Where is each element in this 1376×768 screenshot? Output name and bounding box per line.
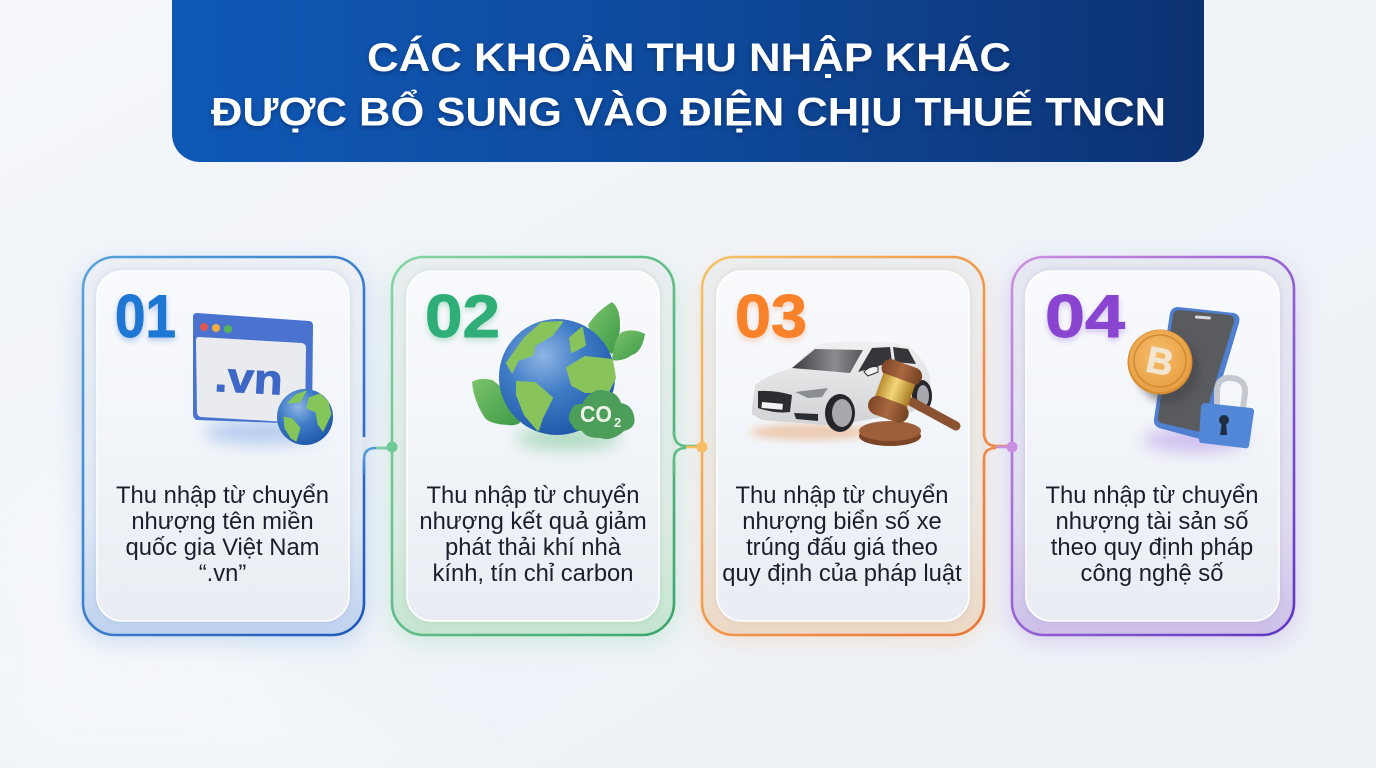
card 04 text: theo quy định pháp bbox=[1051, 534, 1253, 561]
card 03 text: trúng đấu giá theo bbox=[746, 534, 938, 561]
card 02 text: nhượng kết quả giảm bbox=[419, 508, 647, 535]
card 01 text: Thu nhập từ chuyển bbox=[116, 482, 329, 509]
card 04 text bbox=[1045, 482, 1259, 587]
card 04 text: công nghệ số bbox=[1081, 560, 1223, 587]
title text: ĐƯỢC BỔ SUNG VÀO ĐIỆN CHỊU THUẾ TNCN bbox=[211, 88, 1166, 134]
number 03: 03 bbox=[735, 283, 807, 350]
icon: phone with bitcoin coin and padlock: B bbox=[1143, 339, 1177, 384]
icon: .vn browser window with globe bbox=[193, 313, 333, 445]
card 01 text: quốc gia Việt Nam bbox=[125, 534, 320, 561]
panel: card 03 car auction bbox=[700, 257, 986, 641]
icon: earth with leaves and CO2 cloud bbox=[472, 302, 645, 450]
panel: card 04 digital assets bbox=[1010, 257, 1296, 641]
icon: phone with bitcoin coin and padlock bbox=[1128, 307, 1254, 452]
title text bbox=[211, 34, 1166, 134]
icon: earth with leaves and CO2 cloud: 2 bbox=[614, 415, 621, 430]
panel: card 02 carbon bbox=[390, 257, 676, 641]
connector: card 2 to card 3 bbox=[672, 432, 708, 474]
title text: CÁC KHOẢN THU NHẬP KHÁC bbox=[367, 34, 1011, 80]
connector: card 3 to card 4 bbox=[982, 432, 1018, 474]
card 03 text: Thu nhập từ chuyển bbox=[735, 482, 949, 509]
card 03 text: nhượng biển số xe bbox=[742, 508, 942, 535]
card 02 text: Thu nhập từ chuyển bbox=[426, 482, 640, 509]
card 04 text: nhượng tài sản số bbox=[1056, 508, 1248, 535]
card 02 text: kính, tín chỉ carbon bbox=[432, 560, 634, 587]
title banner bbox=[172, 0, 1204, 162]
number 04: 04 bbox=[1045, 283, 1126, 350]
card 02 text bbox=[419, 482, 647, 587]
card 01 text bbox=[116, 482, 329, 587]
number 01: 01 bbox=[115, 283, 176, 350]
card 03 text bbox=[722, 482, 962, 587]
card 01 text: nhượng tên miền bbox=[131, 508, 314, 535]
icon: .vn browser window with globe: .vn bbox=[214, 353, 284, 404]
card 01 text: “.vn” bbox=[199, 560, 246, 587]
icon: earth with leaves and CO2 cloud: CO bbox=[580, 401, 612, 427]
icon: white car and gavel bbox=[750, 341, 956, 446]
card 02 text: phát thải khí nhà bbox=[445, 534, 622, 561]
number 02: 02 bbox=[425, 283, 500, 350]
panel: card 01 domain bbox=[80, 257, 366, 641]
card 04 text: Thu nhập từ chuyển bbox=[1045, 482, 1259, 509]
connector: card 1 to card 2 bbox=[362, 437, 398, 474]
card 03 text: quy định của pháp luật bbox=[722, 560, 962, 587]
